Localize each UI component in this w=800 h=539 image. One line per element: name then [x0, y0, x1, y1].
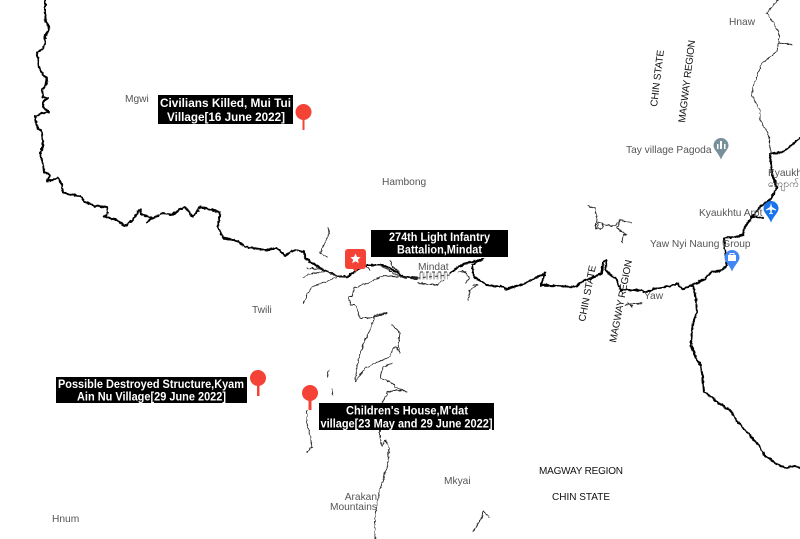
place label: Kyaukhtu Arpt: Kyaukhtu Arpt — [699, 208, 763, 219]
callout: Children's House: Children's House,M'dat — [346, 406, 468, 418]
region label: Magway Region north: MAGWAY REGION — [677, 40, 698, 123]
region label: Magway Region south: MAGWAY REGION — [539, 466, 623, 477]
callout: Children's House: village[23 May and 29 June 2022] — [320, 418, 493, 430]
icon: pagoda pin — [714, 138, 729, 160]
town pattern: Mindat built-up area — [417, 272, 450, 278]
callout: 274th Light Infantry Battalion — [371, 230, 508, 257]
place label: Burmese name: ကျောက် — [768, 177, 799, 192]
place label: Hnaw: Hnaw — [729, 17, 756, 28]
callout: Civilians Killed: Village[16 June 2022] — [167, 112, 285, 124]
place label: Tay village Pagoda: Tay village Pagoda — [626, 145, 712, 156]
place label: Yaw Nyi Naung Group: Yaw Nyi Naung Group — [650, 239, 751, 250]
callout: Civilians Killed: Civilians Killed, Mui Tui — [160, 98, 291, 110]
icon: red star marker — [345, 249, 366, 272]
callout: 274th Light Infantry Battalion: Battalion,Mindat — [397, 244, 482, 256]
icon: airport pin — [764, 201, 778, 222]
region label: Chin State north: CHIN STATE — [649, 49, 667, 107]
region label: Chin State centre: CHIN STATE — [577, 264, 599, 323]
place label: Yaw: Yaw — [644, 291, 664, 302]
callout: 274th Light Infantry Battalion: 274th Light Infantry — [389, 232, 491, 244]
icon: shopping pin — [724, 250, 740, 272]
callout: Possible Destroyed Structure: Ain Nu Village[29 June 2022] — [77, 392, 226, 404]
place label: Mgwi: Mgwi — [125, 94, 149, 105]
place label: Twili: Twili — [252, 305, 272, 316]
region label: Magway Region centre: MAGWAY REGION — [608, 259, 635, 344]
place label: Mkyai: Mkyai — [444, 476, 471, 487]
place label: Hambong: Hambong — [382, 177, 427, 188]
callout: Possible Destroyed Structure — [56, 377, 247, 404]
place label: Hnum: Hnum — [52, 514, 79, 525]
region label: Chin State south: CHIN STATE — [552, 492, 610, 503]
icon: red pin Civilians Killed — [296, 104, 312, 130]
place label: Arakan Mountains: Mountains — [330, 502, 377, 513]
place label: Arakan Mountains: Arakan — [345, 492, 377, 503]
callout: Possible Destroyed Structure: Possible Destroyed Structure,Kyam — [58, 379, 244, 391]
callout: Children's House — [319, 403, 494, 430]
icon: red pin Children's House — [302, 385, 318, 410]
icon: red pin Destroyed Structure — [250, 370, 266, 396]
callout: Civilians Killed — [158, 95, 293, 124]
place label: Mindat: Mindat — [418, 262, 449, 273]
rivers: thin river network — [303, 0, 792, 539]
